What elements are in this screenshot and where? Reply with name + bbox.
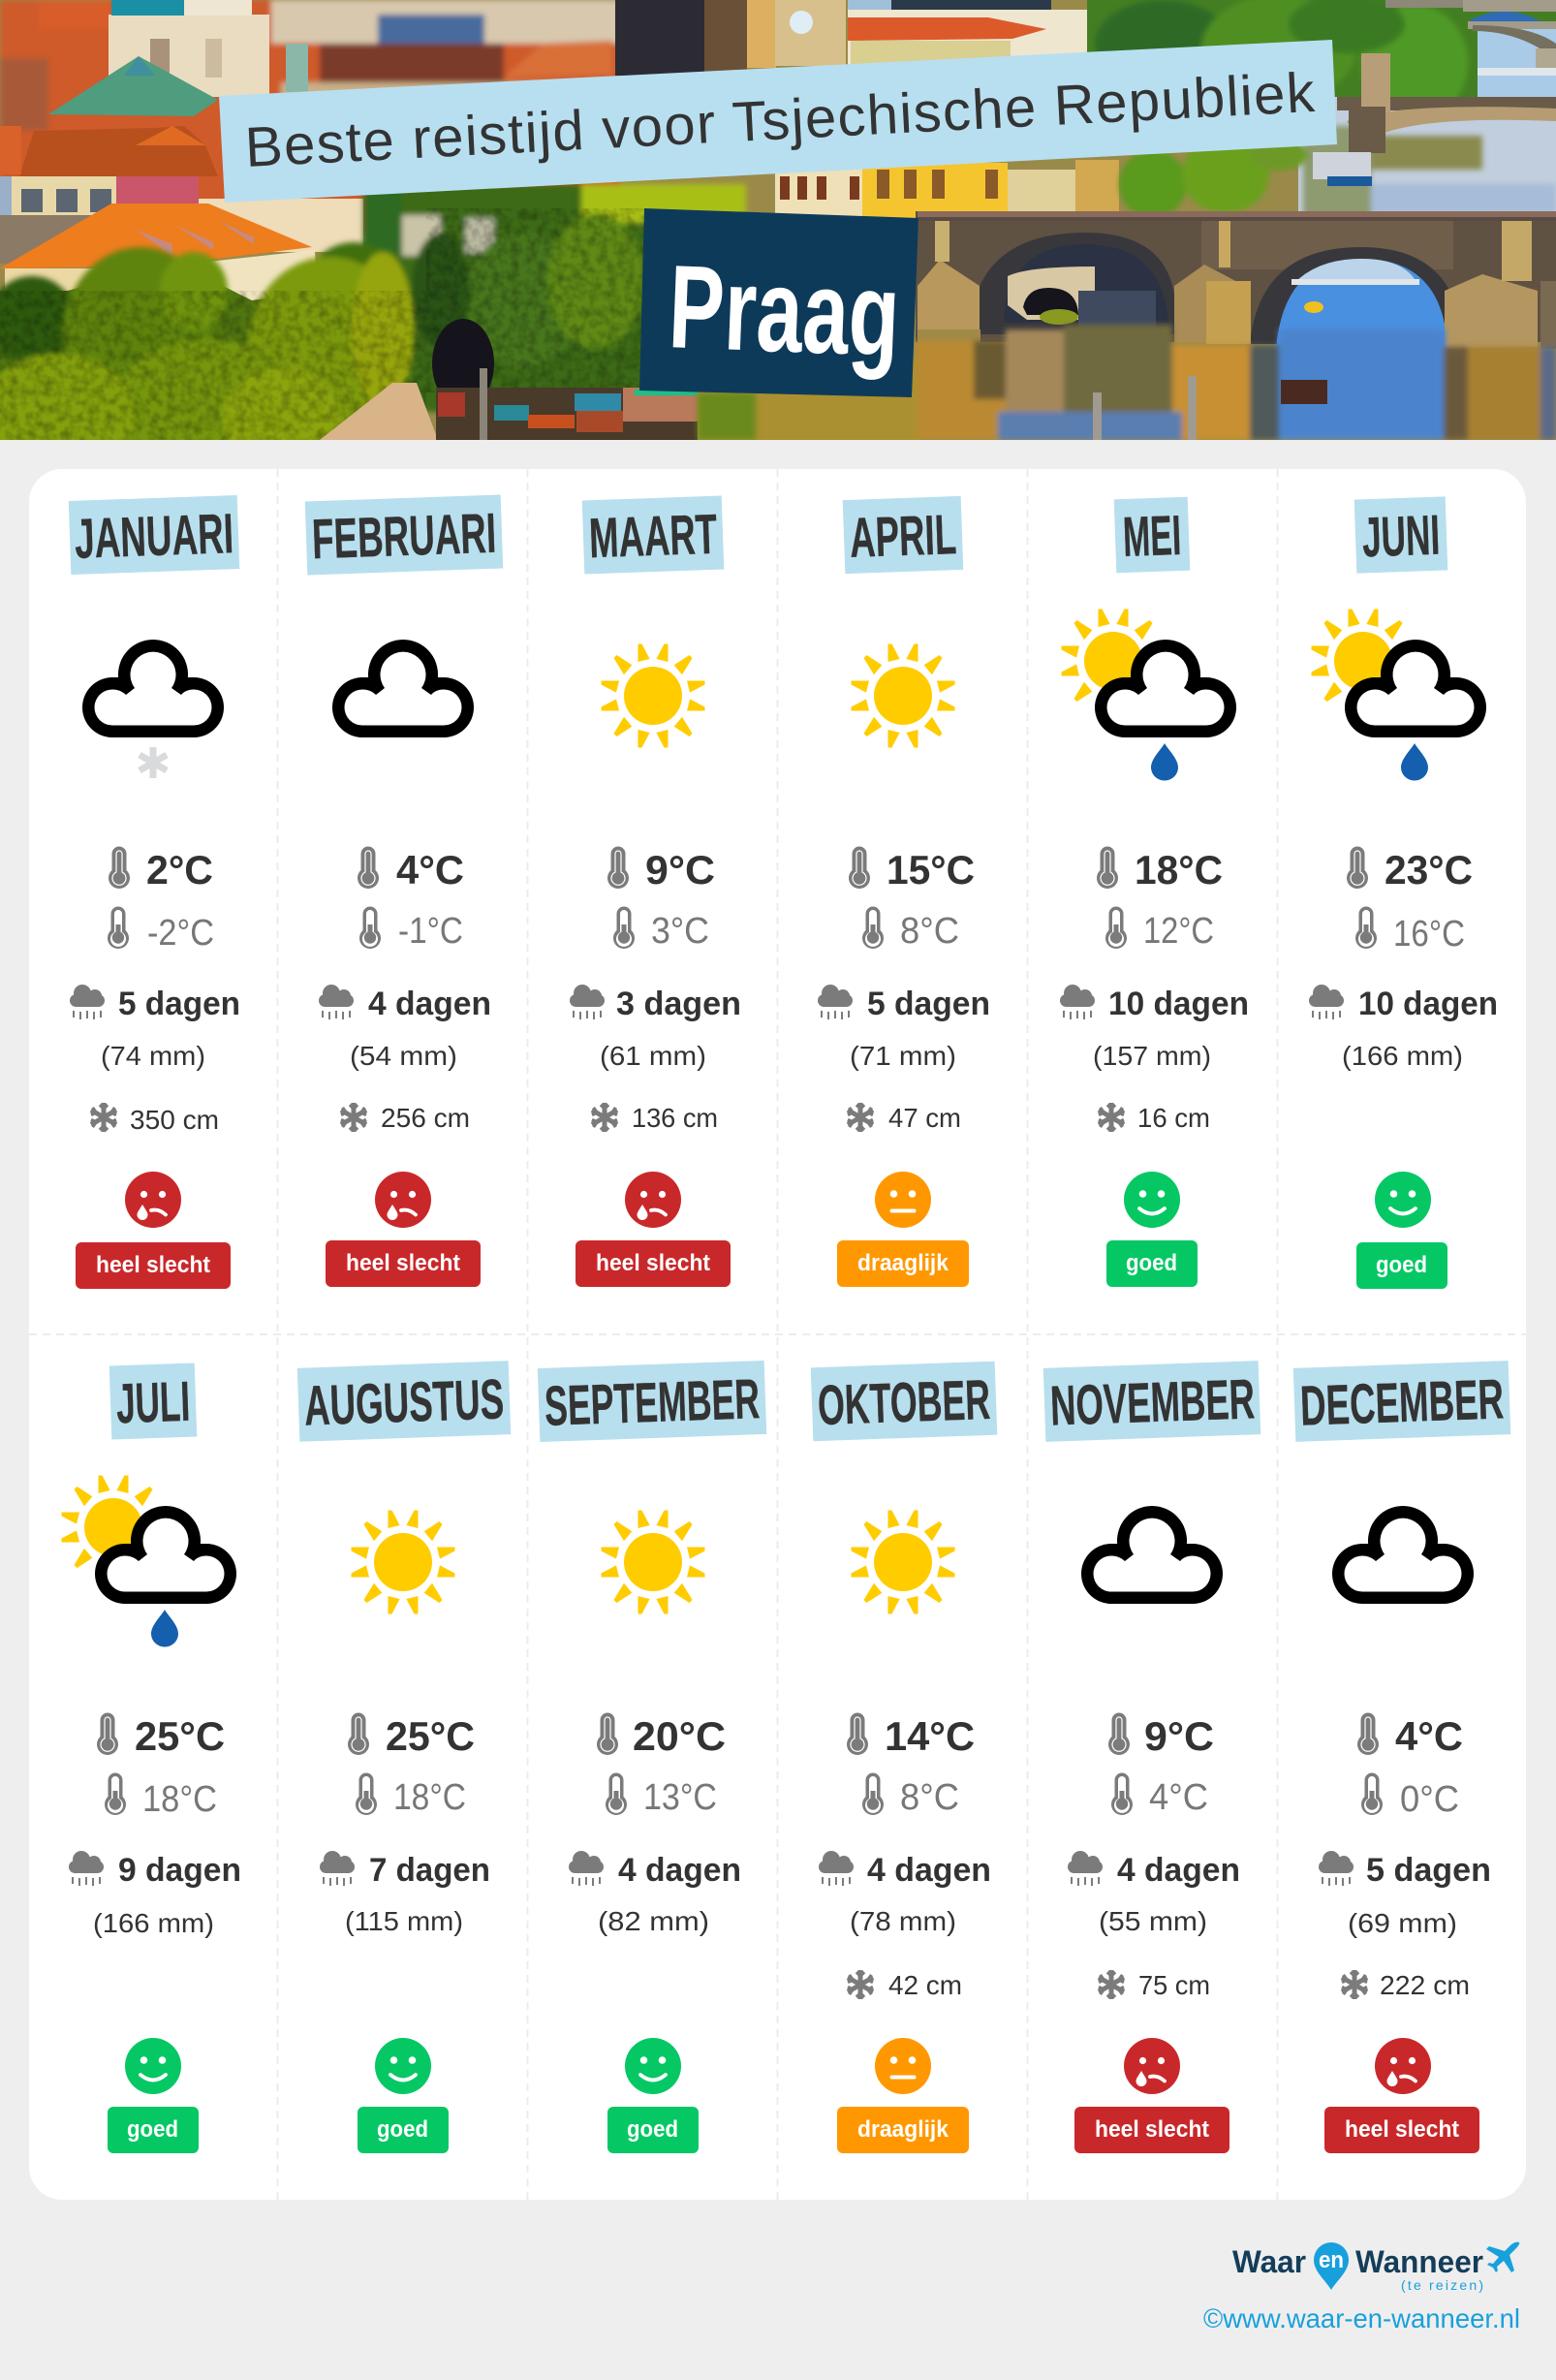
rating label: goed (377, 2116, 428, 2143)
snow depth: 16 cm (1137, 1103, 1210, 1133)
rating label: goed (627, 2116, 678, 2143)
min temperature: 13°C (643, 1777, 717, 1818)
snow depth: 47 cm (888, 1103, 961, 1133)
title banner: Beste reistijd voor Tsjechische Republiek (243, 61, 1317, 179)
min temperature: 0°C (1400, 1779, 1459, 1820)
rain days (320, 1851, 490, 1889)
rating label (607, 2107, 699, 2153)
min temperature (1105, 907, 1214, 952)
snow depth (1099, 1970, 1210, 2000)
max temperature (1357, 1713, 1463, 1759)
logo: Waar en Wanneer: Waar (1232, 2244, 1306, 2279)
panel: juli (62, 1362, 241, 2153)
rain days (70, 985, 240, 1022)
panel: november (1043, 1361, 1260, 2153)
rating label (358, 2107, 449, 2153)
rating smiley (375, 1172, 431, 1228)
icon: location pin (1314, 2242, 1349, 2290)
month tag: maart (582, 496, 724, 574)
rain days: 5 dagen (118, 986, 240, 1022)
min temperature (1111, 1773, 1208, 1818)
month tag: mei (1114, 497, 1190, 573)
max temperature (847, 1713, 975, 1759)
min temperature (613, 907, 709, 952)
max temperature (358, 847, 464, 892)
weather icon: sun, cloud and rain (62, 1475, 236, 1647)
max temperature (607, 847, 715, 892)
min temperature: 12°C (1143, 911, 1214, 952)
snow depth: 42 cm (888, 1970, 962, 2000)
snow depth (1099, 1103, 1210, 1133)
rain days: 4 dagen (618, 1852, 741, 1889)
rainfall amount: (74 mm) (101, 1041, 205, 1071)
white panel with monthly grid (29, 469, 1526, 2200)
rating label (837, 2107, 969, 2153)
min temperature (862, 907, 959, 952)
min temperature (356, 1773, 466, 1818)
rain days: 4 dagen (368, 986, 491, 1022)
month tag: november (1043, 1361, 1260, 1442)
month tag: januari (69, 495, 239, 575)
min temperature: 8°C (900, 911, 959, 952)
panel: oktober (811, 1362, 997, 2153)
rating smiley (375, 2038, 431, 2094)
min temperature (606, 1773, 717, 1818)
header photo: Prague skyline and Charles Bridge (0, 0, 1556, 475)
rating smiley (875, 2038, 931, 2094)
rain days: 7 dagen (369, 1852, 490, 1889)
snow depth: 222 cm (1380, 1970, 1470, 2000)
max temperature: 25°C (135, 1713, 225, 1759)
month tag: augustus: AUGUSTUS (303, 1367, 505, 1438)
min temperature (359, 907, 463, 952)
month tag: april: APRIL (849, 503, 957, 570)
month tag: mei: MEI (1122, 504, 1182, 569)
rainfall amount: (166 mm) (93, 1908, 214, 1938)
stone bridge (916, 221, 1556, 342)
panel: februari (305, 494, 503, 1287)
weather icon: cloud (1081, 1506, 1223, 1604)
weather icon: sun, cloud and rain (1062, 609, 1236, 781)
rain days: 5 dagen (867, 986, 990, 1022)
rating smiley (1124, 1172, 1180, 1228)
rating label (1356, 1242, 1447, 1289)
top right: buildings, trees, bridge, water (698, 359, 920, 440)
city name box: Praag: Praag (667, 240, 902, 381)
max temperature: 4°C (1395, 1713, 1463, 1759)
panel: mei (1060, 497, 1249, 1287)
snow depth: 75 cm (1138, 1970, 1210, 2000)
weather icon: sun (851, 1510, 955, 1614)
rating label: heel slecht (346, 1250, 460, 1276)
min temperature (108, 907, 214, 954)
rating label (326, 1240, 481, 1287)
rating label: goed (1126, 1250, 1177, 1276)
month tag: maart: MAART (588, 503, 718, 570)
rainfall amount: (78 mm) (850, 1906, 956, 1936)
snow depth (1342, 1970, 1470, 2000)
min temperature: 18°C (393, 1777, 466, 1818)
min temperature: 3°C (651, 911, 709, 952)
rating label: heel slecht (1345, 2116, 1459, 2143)
rating label (1324, 2107, 1479, 2153)
snow depth (592, 1103, 718, 1133)
max temperature (597, 1713, 726, 1759)
below banner right (1298, 97, 1556, 211)
max temperature: 2°C (146, 847, 213, 892)
rating label: goed (1376, 1252, 1427, 1278)
month tag: februari (305, 494, 503, 576)
rainfall amount: (54 mm) (350, 1041, 457, 1071)
min temperature: -1°C (398, 911, 463, 952)
rain days: 9 dagen (118, 1852, 241, 1889)
rainfall amount: (69 mm) (1348, 1908, 1457, 1938)
snow depth: 136 cm (632, 1103, 718, 1133)
month tag: september: SEPTEMBER (544, 1367, 761, 1438)
rainfall amount: (71 mm) (850, 1041, 956, 1071)
panel: maart (570, 496, 741, 1287)
snow depth: 350 cm (130, 1105, 219, 1135)
month tag: juli: JULI (115, 1370, 191, 1435)
logo: Waar en Wanneer (1232, 2242, 1519, 2293)
max temperature (849, 847, 975, 892)
rainfall amount: (82 mm) (598, 1906, 709, 1936)
max temperature: 25°C (386, 1713, 475, 1759)
rating label: draaglijk (857, 1250, 949, 1276)
weather icon: cloud (332, 640, 474, 737)
max temperature: 23°C (1385, 847, 1473, 892)
rainfall amount: (115 mm) (345, 1906, 463, 1936)
max temperature (348, 1713, 475, 1759)
month tag: juli (109, 1362, 197, 1440)
city name box: Praag (639, 208, 918, 397)
rating smiley (1375, 2038, 1431, 2094)
website url: ©www.waar-en-wanneer.nl (1203, 2303, 1520, 2333)
rain days (569, 1851, 741, 1889)
rain days: 10 dagen (1108, 986, 1249, 1022)
min temperature (862, 1773, 959, 1818)
rating smiley (625, 2038, 681, 2094)
logo: Waar en Wanneer: en (1319, 2247, 1344, 2273)
weather icon: sun (601, 1510, 705, 1614)
weather icon: cloud (1332, 1506, 1474, 1604)
max temperature (1097, 847, 1223, 892)
max temperature: 9°C (1144, 1713, 1214, 1759)
snow depth (848, 1103, 961, 1133)
rainfall amount: (61 mm) (600, 1041, 706, 1071)
min temperature (1355, 907, 1465, 955)
rainfall amount: (55 mm) (1099, 1906, 1207, 1936)
rating label (108, 2107, 199, 2153)
min temperature: 8°C (900, 1777, 959, 1818)
month tag: april (843, 496, 963, 574)
snow depth (341, 1103, 470, 1133)
max temperature: 15°C (887, 847, 975, 892)
rating label: goed (127, 2116, 178, 2143)
snow depth (848, 1970, 962, 2000)
weather icon: sun (351, 1510, 455, 1614)
rating smiley (125, 2038, 181, 2094)
snow depth: 256 cm (381, 1103, 470, 1133)
icon: airplane (1486, 2242, 1519, 2272)
rain days: 10 dagen (1358, 986, 1498, 1022)
rating smiley (1375, 1172, 1431, 1228)
rain days (818, 985, 990, 1022)
rain days: 5 dagen (1366, 1852, 1491, 1889)
rain days (819, 1851, 991, 1889)
rain days: 4 dagen (1117, 1852, 1240, 1889)
month tag: augustus (297, 1361, 511, 1442)
rating label: draaglijk (857, 2116, 949, 2143)
logo: Waar en Wanneer: Wanneer (1355, 2244, 1483, 2279)
rating smiley (125, 1172, 181, 1228)
rating label (576, 1240, 731, 1287)
month tag: oktober (811, 1362, 997, 1441)
rating label (1074, 2107, 1229, 2153)
min temperature: 16°C (1393, 914, 1465, 955)
rating smiley (1124, 2038, 1180, 2094)
rating label (1106, 1240, 1198, 1287)
min temperature (1361, 1773, 1459, 1820)
month tag: februari: FEBRUARI (311, 502, 497, 571)
rating label (76, 1242, 231, 1289)
month tag: september (538, 1361, 766, 1442)
max temperature: 20°C (633, 1713, 726, 1759)
min temperature: 4°C (1149, 1777, 1208, 1818)
panel: december (1293, 1361, 1510, 2153)
rainfall amount: (157 mm) (1093, 1041, 1211, 1071)
logo: Waar en Wanneer: (te reizen) (1401, 2277, 1483, 2293)
rating label: heel slecht (96, 1252, 210, 1278)
month tag: juni: JUNI (1361, 504, 1441, 569)
min temperature (105, 1773, 217, 1820)
weather icon: sun (851, 643, 955, 748)
rating label (837, 1240, 969, 1287)
max temperature: 9°C (645, 847, 715, 892)
month tag: november: NOVEMBER (1049, 1367, 1256, 1438)
trees left (0, 180, 750, 440)
rain days: 4 dagen (867, 1852, 991, 1889)
rain days: 3 dagen (616, 986, 741, 1022)
rain days (69, 1851, 241, 1889)
rain days (1068, 1851, 1240, 1889)
max temperature (1108, 1713, 1214, 1759)
snow depth (91, 1103, 219, 1135)
weather icon: sun, cloud and rain (1312, 609, 1486, 781)
max temperature (1347, 847, 1473, 892)
panel: juni (1309, 496, 1498, 1289)
max temperature: 14°C (885, 1713, 975, 1759)
month tag: januari: JANUARI (74, 502, 234, 571)
rating label: heel slecht (1095, 2116, 1209, 2143)
title banner (219, 40, 1337, 203)
month tag: oktober: OKTOBER (817, 1368, 991, 1437)
min temperature: 18°C (142, 1779, 217, 1820)
rating smiley (875, 1172, 931, 1228)
panel: september (538, 1361, 766, 2153)
panel: augustus (297, 1361, 511, 2153)
rating smiley (625, 1172, 681, 1228)
panel: januari (69, 495, 240, 1289)
month tag: juni (1354, 496, 1447, 574)
min temperature: -2°C (147, 913, 214, 954)
max temperature (97, 1713, 225, 1759)
max temperature (109, 847, 213, 892)
weather icon: cloud with snow (82, 640, 224, 778)
rainfall amount: (166 mm) (1342, 1041, 1463, 1071)
weather icon: sun (601, 643, 705, 748)
rating label: heel slecht (596, 1250, 710, 1276)
panel: april (818, 496, 990, 1287)
rain days (319, 985, 491, 1022)
max temperature: 4°C (396, 847, 464, 892)
river reflections (698, 325, 1556, 440)
max temperature: 18°C (1135, 847, 1223, 892)
